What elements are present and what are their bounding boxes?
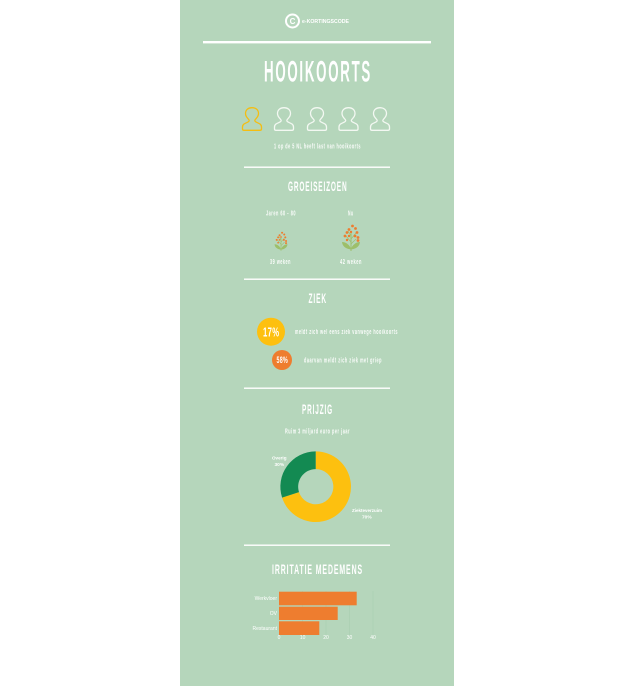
label: ziekteverzuim: Ziekteverzuim (352, 508, 382, 514)
axis labels: categories: Restaurant (253, 626, 278, 632)
icon: highlighted person (242, 108, 262, 130)
section: irritatie medemens: IRRITATIE MEDEMENS (272, 561, 363, 577)
axis labels: categories: Werkvloer (255, 596, 277, 602)
label: 42 weken: 42 weken (340, 259, 362, 266)
label: overig value: 30% (274, 462, 285, 468)
text: 58% description: daarvan meldt zich ziek met griep (304, 358, 382, 364)
stat: 17%: 17% (263, 324, 280, 340)
section: prijzig: PRIJZIG (302, 401, 333, 417)
segment: ziekteverzuim 70% (282, 451, 351, 522)
axis labels: values: 0 (278, 635, 281, 641)
label: overig: Overig (272, 456, 287, 462)
infographic: HOOIKOORTS (264, 56, 372, 88)
stat: 58%: 58% (276, 355, 288, 365)
axis labels: values: 10 (300, 635, 306, 641)
axis labels: values: 20 (323, 635, 329, 641)
section: ziek (257, 290, 398, 370)
bar: ov (279, 607, 338, 620)
icon: person 4 (339, 108, 358, 130)
icon: person 3 (308, 108, 326, 130)
section: prijzig (272, 401, 382, 522)
icon: small plant (275, 232, 287, 251)
stat: 58% (272, 350, 292, 370)
axis labels: categories (253, 596, 278, 632)
label: jaren 60-80: Jaren 60 - 80 (266, 210, 296, 218)
axis labels: values: 30 (347, 635, 352, 641)
icon: person 2 (274, 108, 294, 130)
subheading: cost: Ruim 3 miljard euro per jaar (285, 428, 350, 436)
donut chart (272, 451, 382, 522)
icon: person 5 (370, 108, 390, 130)
section: groeiseizoen (266, 178, 362, 266)
bar: restaurant (279, 621, 319, 635)
axis labels: categories: OV (270, 611, 278, 617)
bar chart (253, 591, 376, 641)
logo: e-kortingscode: C (290, 17, 296, 26)
icon row: 1 in 5 people (242, 108, 390, 130)
icon: large plant (342, 225, 360, 251)
section: groeiseizoen: Nu (348, 210, 354, 218)
bar: werkvloer (279, 592, 357, 605)
caption: 1 in 5: 1 op de 5 NL heeft last van hooikoorts (274, 144, 361, 150)
stat: 17% (257, 318, 285, 346)
segment: overig 30% (280, 451, 316, 498)
text: 17% description: meldt zich wel eens ziek vanwege hooikoorts (295, 329, 398, 336)
section: irritatie medemens (253, 561, 376, 641)
logo: e-kortingscode (286, 14, 350, 28)
panel: background (180, 0, 454, 686)
axis labels: values (278, 635, 376, 641)
label: ziekteverzuim value: 70% (362, 514, 372, 520)
axis labels: values: 40 (370, 635, 376, 641)
label: 39 weken: 39 weken (270, 259, 291, 266)
section: groeiseizoen: GROEISEIZOEN (288, 178, 348, 194)
section: ziek: ZIEK (308, 290, 327, 306)
logo: e-kortingscode: e-KORTINGSCODE (302, 19, 350, 25)
